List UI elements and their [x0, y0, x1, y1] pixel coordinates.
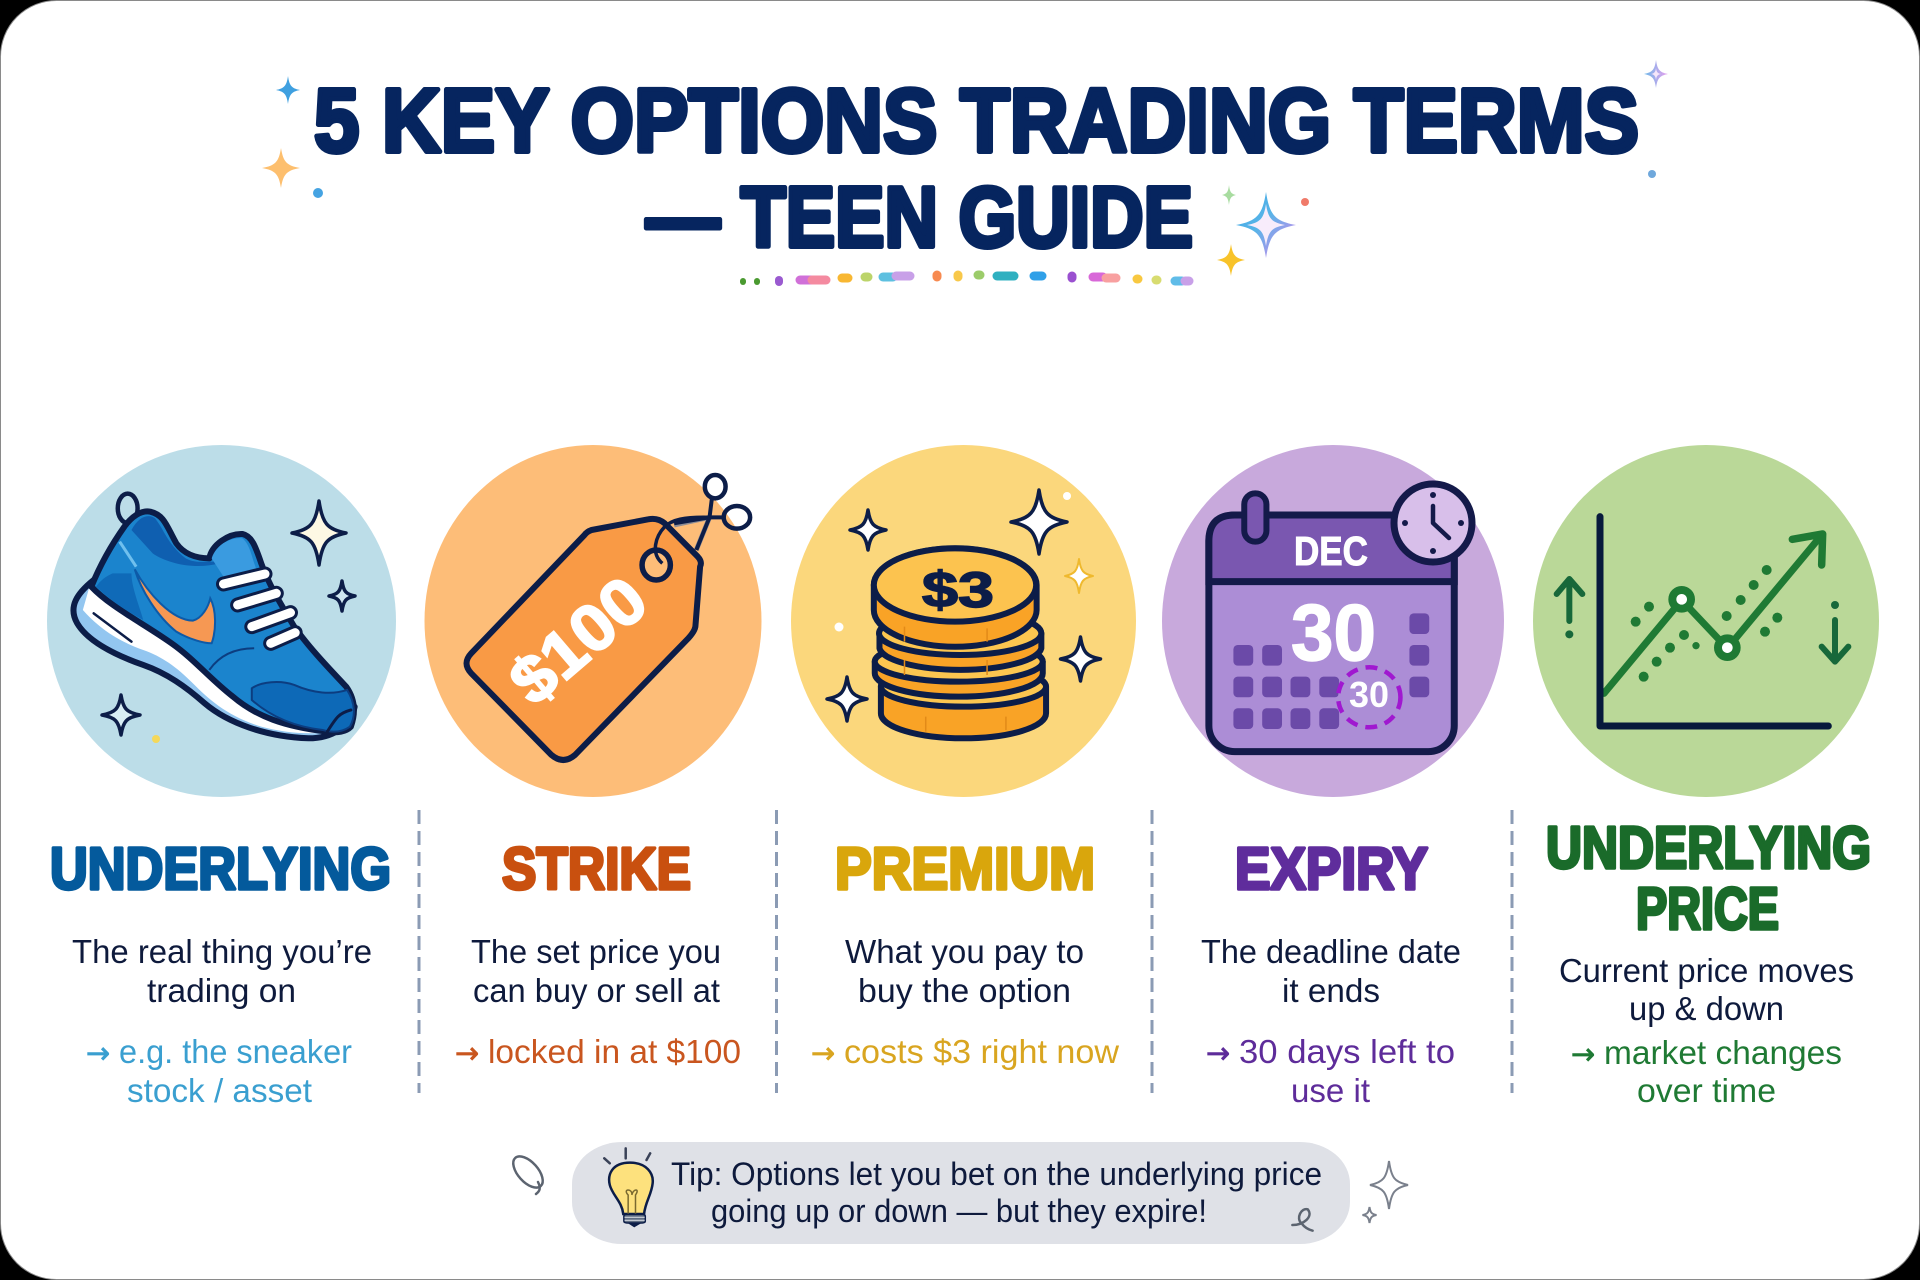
tip text: going up or down — but they expire! [711, 1193, 1207, 1229]
icon: price chart [1557, 517, 1848, 726]
title confetti underline [743, 275, 1189, 282]
example note: stock / asset [127, 1072, 312, 1109]
tag price: $100 [495, 562, 661, 719]
icon: calendar [1209, 493, 1454, 752]
column 3: premium [791, 445, 1136, 1070]
coin value: $3 [922, 562, 994, 618]
definition text: The set price you [471, 933, 721, 970]
definition text: The real thing you’re [72, 933, 372, 970]
circle background [791, 445, 1136, 797]
heading: underlying: UNDERLYING [50, 836, 391, 902]
heading: premium: PREMIUM [835, 836, 1095, 902]
circle background [1533, 445, 1879, 797]
calendar month and dates [1291, 528, 1389, 715]
calendar month and dates: DEC [1294, 528, 1368, 574]
definition text [72, 933, 372, 1009]
example note: use it [1291, 1072, 1370, 1109]
tip pill [572, 1142, 1350, 1244]
example note: → [86, 1036, 110, 1070]
definition text: can buy or sell at [473, 972, 720, 1009]
example note: → [811, 1036, 835, 1070]
example note: → [455, 1036, 479, 1070]
title sparkles [262, 60, 1668, 276]
icon: coin sparkles [827, 490, 1100, 721]
definition text [1559, 952, 1854, 1027]
definition text [845, 933, 1084, 1009]
example note: e.g. the sneaker [119, 1033, 352, 1070]
title [314, 72, 1639, 266]
example note [1206, 1033, 1455, 1109]
column 2: strike [424, 445, 762, 1070]
title: — TEEN GUIDE [646, 170, 1193, 266]
column 1: underlying [47, 445, 396, 1109]
definition text: up & down [1629, 990, 1784, 1027]
icon: clock [1394, 484, 1472, 562]
definition text: buy the option [858, 972, 1071, 1009]
icon: price tag with scissors [467, 475, 750, 760]
title: 5 KEY OPTIONS TRADING TERMS [314, 72, 1639, 172]
icon: sneaker sparkles [102, 501, 355, 743]
definition text: The deadline date [1201, 933, 1461, 970]
definition text [471, 933, 721, 1009]
circle background [424, 445, 762, 797]
column 5: underlying price [1533, 445, 1879, 1109]
example note: costs $3 right now [844, 1033, 1119, 1070]
heading: strike: STRIKE [502, 836, 691, 902]
example note [1571, 1034, 1842, 1109]
definition text: trading on [147, 972, 296, 1009]
definition text: Current price moves [1559, 952, 1854, 989]
example note: → [1206, 1036, 1230, 1070]
circle background [1162, 445, 1504, 797]
calendar month and dates: 30 [1349, 674, 1389, 715]
example note: → [1571, 1037, 1595, 1071]
icon: sneaker [73, 494, 355, 738]
column 4: expiry [1162, 445, 1504, 1109]
doodle: left loop [508, 1151, 548, 1194]
tip text: Tip: Options let you bet on the underlying price [671, 1156, 1322, 1192]
icon: coin stack [874, 548, 1046, 738]
example note: locked in at $100 [488, 1033, 741, 1070]
definition text [1201, 933, 1461, 1009]
doodle: inner squiggle [1292, 1209, 1313, 1231]
heading: underlying price: PRICE [1636, 876, 1779, 942]
definition text: it ends [1282, 972, 1380, 1009]
calendar month and dates: 30 [1291, 588, 1376, 677]
definition text: What you pay to [845, 933, 1084, 970]
example note: over time [1637, 1072, 1776, 1109]
example note [86, 1033, 352, 1109]
circle background [47, 445, 396, 797]
icon: light bulb [604, 1148, 653, 1227]
heading: underlying price: UNDERLYING [1546, 815, 1871, 881]
heading: expiry: EXPIRY [1235, 836, 1428, 902]
tip callout [572, 1142, 1350, 1244]
example note: 30 days left to [1239, 1033, 1455, 1070]
example note: market changes [1604, 1034, 1842, 1071]
doodle: right sparkles [1362, 1161, 1408, 1223]
heading: underlying price [1546, 815, 1871, 942]
tip text [671, 1156, 1322, 1229]
